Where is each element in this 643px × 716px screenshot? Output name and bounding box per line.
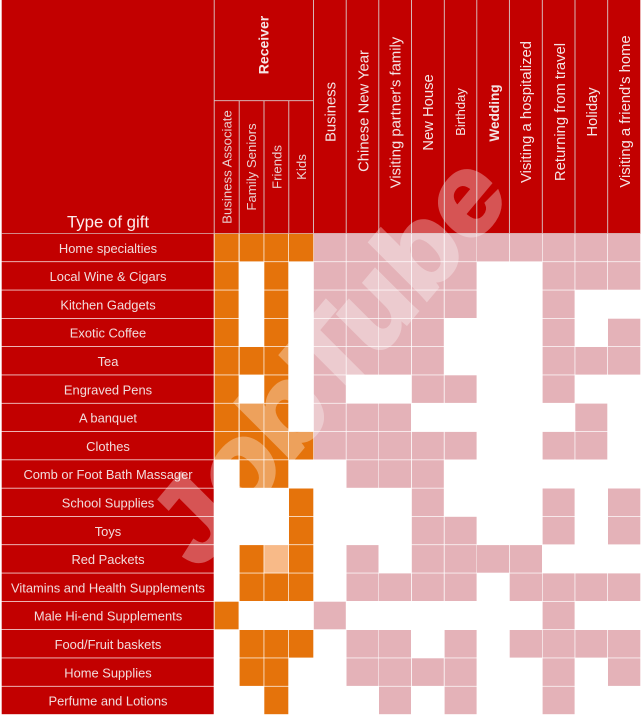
row: Male Hi-end Supplements: Male Hi-end Supplements [34, 609, 182, 624]
row: Male Hi-end Supplements [2, 602, 575, 629]
row: Local Wine & Cigars: Local Wine & Cigars [50, 269, 166, 284]
receiver column labels: Kids [294, 154, 309, 180]
row: Exotic Coffee [2, 319, 640, 346]
receiver column labels [220, 110, 309, 224]
row: Comb or Foot Bath Massager [2, 460, 444, 488]
occasion column labels: Holiday [585, 87, 601, 137]
row: Food/Fruit baskets: Food/Fruit baskets [55, 637, 161, 652]
heading: receiver: Receiver [256, 15, 272, 74]
row: Red Packets [2, 545, 542, 573]
row: Tea: Tea [98, 354, 119, 369]
occasion column labels: Returning from travel [553, 43, 569, 181]
occasion column labels: Visiting partner's family [388, 36, 404, 188]
row: Perfume and Lotions: Perfume and Lotions [49, 694, 167, 709]
receiver column labels: Friends [270, 145, 284, 189]
row: Toys [2, 517, 640, 544]
row: Comb or Foot Bath Massager: Comb or Foot Bath Massager [23, 467, 193, 482]
heading: type of gift: Type of gift [67, 212, 149, 232]
receiver column labels: Business Associate [220, 110, 235, 224]
watermark: JobTube [128, 129, 528, 589]
row: A banquet: A banquet [79, 411, 137, 426]
row: Clothes: Clothes [86, 439, 130, 454]
row: Clothes [2, 432, 607, 460]
row: Engraved Pens: Engraved Pens [64, 382, 152, 397]
occasion column labels: Chinese New Year [356, 50, 372, 172]
row: Vitamins and Health Supplements [2, 573, 640, 601]
row: Perfume and Lotions [2, 687, 575, 714]
row: Toys: Toys [95, 524, 121, 539]
occasion column labels: Birthday [453, 88, 468, 136]
row: Home specialties [2, 234, 640, 261]
occasion column labels: Visiting a hospitalized [519, 41, 535, 183]
receiver column labels: Family Seniors [244, 123, 259, 211]
row: Tea [2, 347, 640, 375]
row: A banquet [2, 404, 607, 431]
occasion column labels: Business [324, 82, 340, 142]
row: Exotic Coffee: Exotic Coffee [70, 326, 146, 341]
occasion column labels [324, 35, 634, 188]
header band [2, 0, 640, 234]
row: Kitchen Gadgets: Kitchen Gadgets [60, 297, 156, 312]
row: Engraved Pens [2, 375, 575, 403]
row: School Supplies [2, 488, 640, 516]
row: Food/Fruit baskets [2, 630, 640, 658]
occasion column labels: New House [421, 74, 437, 151]
row: Home specialties: Home specialties [59, 241, 157, 256]
row: Local Wine & Cigars [2, 262, 640, 290]
occasion column labels: Visiting a friend's home [618, 35, 634, 188]
row: Home Supplies: Home Supplies [64, 665, 152, 680]
row: School Supplies: School Supplies [62, 496, 154, 510]
row: Kitchen Gadgets [2, 290, 575, 318]
occasion column labels: Wedding [487, 84, 502, 142]
row: Vitamins and Health Supplements: Vitamins and Health Supplements [11, 580, 205, 595]
row: Red Packets: Red Packets [71, 552, 145, 567]
row: Home Supplies [2, 658, 640, 686]
